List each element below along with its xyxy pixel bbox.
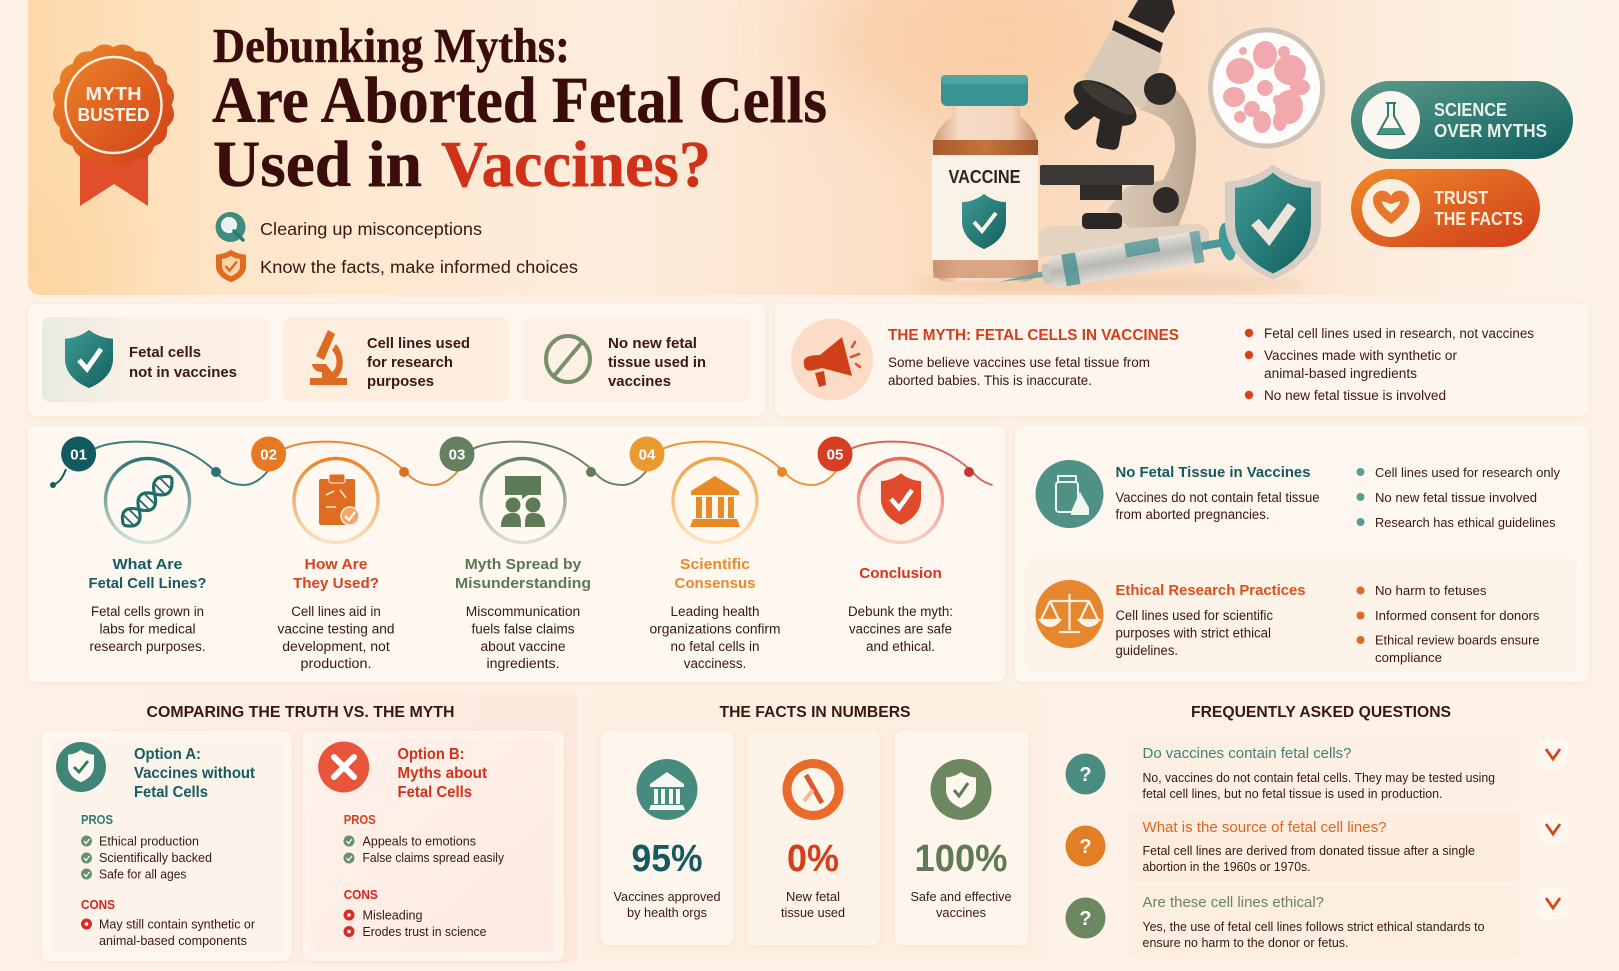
- faq: are cell lines ethical: ?: [1079, 908, 1092, 930]
- card: option A: Scientifically backed: [99, 851, 212, 865]
- stat: 0%: New fetal: [786, 889, 840, 904]
- step 02: How Are: [304, 556, 368, 573]
- badge: myth busted: [53, 44, 174, 206]
- step 03: ingredients.: [486, 656, 560, 671]
- panel: faq: [1054, 692, 1589, 963]
- icon: people with speech bubble: [501, 476, 545, 527]
- pill: science over myths: OVER MYTHS: [1434, 121, 1547, 141]
- myth bullets: Vaccines made with synthetic or: [1264, 348, 1457, 363]
- step 04: organizations confirm: [650, 622, 780, 636]
- illustration: teal shield: [1225, 164, 1321, 280]
- panel: facts in numbers: [587, 692, 1043, 961]
- step 03: about vaccine: [480, 639, 566, 654]
- step 05: [818, 436, 953, 654]
- stat: 95%: [600, 731, 733, 945]
- pill: science over myths: SCIENCE: [1434, 100, 1507, 120]
- step 01: labs for medical: [100, 622, 196, 636]
- panel: faq: FREQUENTLY ASKED QUESTIONS: [1191, 704, 1451, 721]
- badge: myth busted: BUSTED: [78, 104, 150, 125]
- card: option A: Vaccines without: [134, 765, 256, 782]
- step 02: development, not: [282, 639, 390, 654]
- block: no fetal tissue: Research has ethical guidelines: [1375, 515, 1556, 530]
- faq: source of fetal cell lines: Fetal cell lines are derived from donated tissue after a single: [1142, 844, 1475, 858]
- card: option B: [302, 731, 564, 961]
- card: cell lines used for research: for research: [367, 354, 453, 371]
- step 01: [61, 436, 206, 654]
- faq: do vaccines contain fetal cells: No, vaccines do not contain fetal cells. They may be tested using: [1142, 771, 1495, 785]
- title: Are Aborted Fetal Cells: [212, 64, 827, 137]
- block: ethical research: [1026, 558, 1577, 672]
- title: Vaccines?: [441, 128, 711, 201]
- myth bullets: No new fetal tissue is involved: [1264, 388, 1446, 403]
- card: option B: CONS: [344, 888, 378, 902]
- faq: source of fetal cell lines: What is the source of fetal cell lines?: [1142, 819, 1386, 836]
- tagline: know the facts: [216, 250, 578, 282]
- stat: 95%: by health orgs: [627, 905, 707, 920]
- myth bullets: Fetal cell lines used in research, not vaccines: [1264, 326, 1534, 341]
- block: ethical research: purposes with strict ethical: [1116, 626, 1271, 640]
- card: no new fetal tissue: No new fetal: [608, 335, 697, 352]
- card: option A: animal-based components: [99, 934, 247, 948]
- block: no fetal tissue: Cell lines used for research only: [1375, 465, 1560, 480]
- card: option B: False claims spread easily: [362, 851, 505, 865]
- step 03: Miscommunication: [466, 604, 580, 619]
- card: fetal cells not in vaccines: [42, 317, 269, 402]
- panel: the myth: [775, 304, 1589, 416]
- timeline wave: [50, 442, 992, 488]
- step 01: research purposes.: [90, 639, 206, 654]
- faq: source of fetal cell lines: [1066, 811, 1569, 882]
- block: ethical research: guidelines.: [1116, 643, 1178, 658]
- step 01: Fetal cells grown in: [91, 604, 204, 619]
- card: option B: Fetal Cells: [398, 784, 472, 801]
- step 05: 05: [827, 446, 843, 464]
- pill: trust the facts: TRUST: [1434, 188, 1488, 208]
- faq: source of fetal cell lines: abortion in the 1960s or 1970s.: [1142, 860, 1310, 874]
- card: fetal cells not in vaccines: not in vaccines: [129, 364, 237, 381]
- card: option B: Option B:: [398, 746, 464, 763]
- faq: source of fetal cell lines: ?: [1079, 836, 1092, 858]
- step 03: Misunderstanding: [455, 575, 591, 592]
- step 04: no fetal cells in: [670, 639, 760, 654]
- tagline: clearing up misconceptions: [216, 212, 482, 242]
- step 03: fuels false claims: [472, 622, 575, 636]
- card: cell lines used for research: purposes: [367, 373, 434, 390]
- step 05: Debunk the myth:: [848, 604, 953, 619]
- faq: do vaccines contain fetal cells: fetal cell lines, but no fetal tissue is used in production.: [1142, 787, 1442, 801]
- stat: 0%: tissue used: [781, 905, 845, 920]
- stat: 0%: [748, 731, 880, 945]
- block: no fetal tissue: No new fetal tissue involved: [1375, 490, 1537, 505]
- stat: 95%: Vaccines approved: [614, 889, 720, 904]
- step 04: Leading health: [670, 604, 760, 619]
- card: option B: Erodes trust in science: [362, 925, 487, 939]
- pill: trust the facts: THE FACTS: [1434, 209, 1523, 229]
- card: option B: Misleading: [362, 908, 423, 922]
- myth text: aborted babies. This is inaccurate.: [888, 373, 1092, 388]
- stat: 100%: [895, 731, 1028, 945]
- card: option A: CONS: [81, 898, 115, 912]
- card: no new fetal tissue: vaccines: [608, 373, 671, 390]
- card: cell lines used for research: [283, 317, 509, 402]
- step 01: Fetal Cell Lines?: [88, 575, 206, 592]
- stat: 100%: Safe and effective: [910, 889, 1012, 904]
- tagline: know the facts: Know the facts, make informed choices: [260, 257, 578, 277]
- step 04: vacciness.: [684, 656, 746, 671]
- faq: are cell lines ethical: Yes, the use of fetal cell lines follows strict ethical standards to: [1142, 920, 1485, 934]
- block: no fetal tissue: Vaccines do not contain fetal tissue: [1116, 490, 1320, 505]
- faq: do vaccines contain fetal cells: ?: [1079, 764, 1092, 786]
- step 04: Consensus: [674, 575, 756, 592]
- illustration: vaccine vial: [932, 75, 1038, 282]
- step 01: What Are: [112, 556, 182, 573]
- panel: comparison: [28, 692, 578, 963]
- stat: 100%: 100%: [914, 838, 1008, 880]
- faq: are cell lines ethical: Are these cell lines ethical?: [1142, 894, 1324, 911]
- block: ethical research: Ethical review boards ensure: [1375, 632, 1540, 648]
- card: option B: Appeals to emotions: [362, 834, 476, 848]
- icon: megaphone: [791, 318, 873, 400]
- panel: key facts: [28, 304, 765, 416]
- block: no fetal tissue: from aborted pregnancies.: [1116, 507, 1270, 522]
- pill: science over myths: [1351, 81, 1573, 159]
- block: no fetal tissue: No Fetal Tissue in Vaccines: [1116, 464, 1310, 481]
- myth bullets: animal-based ingredients: [1264, 366, 1417, 381]
- step 03: Myth Spread by: [465, 556, 582, 573]
- block: ethical research: compliance: [1375, 650, 1442, 665]
- step 05: Conclusion: [859, 565, 942, 582]
- card: cell lines used for research: Cell lines used: [367, 335, 470, 352]
- card: no new fetal tissue: [523, 317, 750, 402]
- card: option A: Ethical production: [99, 834, 199, 848]
- card: option A: May still contain synthetic or: [99, 918, 255, 932]
- step 02: 02: [260, 446, 277, 464]
- badge: myth busted: MYTH: [86, 83, 142, 104]
- illustration: microscope: [1039, 0, 1209, 257]
- panel: facts in numbers: THE FACTS IN NUMBERS: [720, 704, 911, 721]
- panel: no fetal tissue and ethics: [1015, 426, 1589, 682]
- card: option B: PROS: [344, 813, 376, 827]
- myth text: Some believe vaccines use fetal tissue from: [888, 355, 1150, 370]
- title: Debunking Myths:: [213, 18, 570, 73]
- faq: do vaccines contain fetal cells: Do vaccines contain fetal cells?: [1142, 745, 1352, 762]
- faq: do vaccines contain fetal cells: [1066, 735, 1569, 808]
- step 05: and ethical.: [866, 639, 935, 654]
- block: no fetal tissue: [1036, 460, 1560, 530]
- pill: trust the facts: [1351, 169, 1540, 247]
- stat: 95%: 95%: [632, 838, 702, 880]
- panel: timeline: [28, 426, 1005, 682]
- step 02: They Used?: [293, 575, 379, 592]
- illustration: syringe: [996, 222, 1239, 301]
- card: option A: Safe for all ages: [99, 868, 186, 882]
- faq: are cell lines ethical: [1066, 885, 1569, 958]
- card: option A: [42, 731, 292, 961]
- myth text: THE MYTH: FETAL CELLS IN VACCINES: [888, 327, 1179, 344]
- stat: 0%: 0%: [787, 838, 839, 880]
- block: ethical research: Ethical Research Practices: [1116, 582, 1306, 599]
- step 01: 01: [70, 446, 87, 464]
- card: option A: Option A:: [134, 746, 201, 763]
- step 03: 03: [449, 446, 465, 464]
- step 02: vaccine testing and: [278, 622, 394, 636]
- card: no new fetal tissue: tissue used in: [608, 354, 706, 371]
- block: ethical research: Cell lines used for scientific: [1116, 608, 1273, 623]
- icon: red shield: [881, 473, 921, 525]
- block: ethical research: No harm to fetuses: [1375, 583, 1487, 598]
- card: option A: PROS: [81, 813, 113, 827]
- step 04: 04: [639, 446, 656, 464]
- icon: institution: [690, 476, 740, 527]
- stat: 100%: vaccines: [936, 905, 986, 920]
- step 02: [251, 436, 394, 671]
- card: option A: Fetal Cells: [134, 784, 208, 801]
- panel: comparison: COMPARING THE TRUTH VS. THE MYTH: [146, 704, 454, 721]
- illustration: ground shadow: [910, 276, 1310, 292]
- faq: are cell lines ethical: ensure no harm to the donor or fetus.: [1142, 936, 1348, 950]
- card: fetal cells not in vaccines: Fetal cells: [129, 344, 201, 361]
- icon: dna: [117, 471, 178, 531]
- icon: clipboard: [319, 474, 359, 525]
- card: option B: Myths about: [398, 765, 488, 782]
- myth bullets: [1245, 326, 1534, 403]
- step 02: Cell lines aid in: [291, 604, 381, 619]
- hero banner: [28, 0, 1420, 295]
- step 02: production.: [300, 656, 372, 671]
- title: Used in: [213, 128, 422, 201]
- step 04: Scientific: [680, 556, 750, 573]
- step 05: vaccines are safe: [849, 622, 952, 636]
- title: [212, 18, 827, 201]
- myth text: [888, 327, 1179, 388]
- step 03: [440, 436, 591, 671]
- step 04: [630, 436, 780, 671]
- tagline: clearing up misconceptions: Clearing up misconceptions: [260, 219, 482, 239]
- block: ethical research: Informed consent for donors: [1375, 608, 1540, 623]
- illustration: vaccine vial: VACCINE: [948, 167, 1020, 187]
- illustration: petri dish of cells: [1210, 30, 1322, 146]
